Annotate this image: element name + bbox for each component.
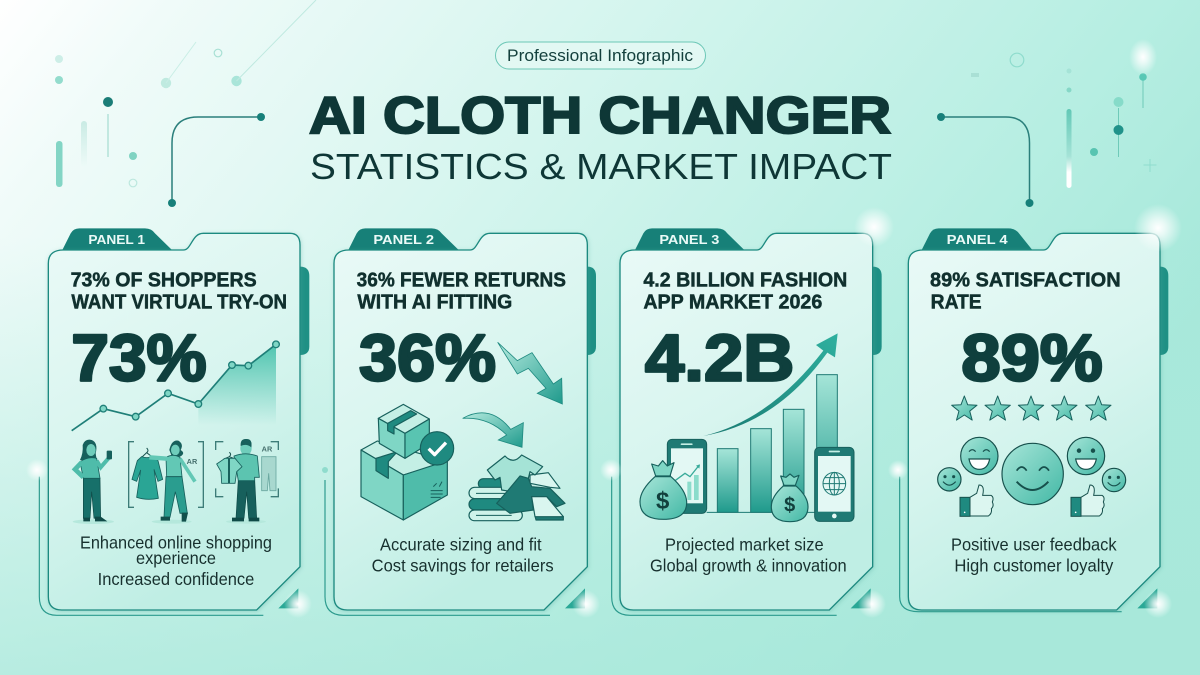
- five star rating: [952, 396, 1111, 420]
- icon: money bag large: $: [656, 487, 669, 514]
- panel 4 big number: 89%: [961, 320, 1103, 394]
- icon: man with shirt and AR frame: [216, 439, 278, 524]
- panel 3: [612, 228, 882, 615]
- subtitle: STATISTICS & MARKET IMPACT: [310, 146, 892, 187]
- icon: AR frame with dress: [129, 441, 203, 524]
- icon: boxes with check: [361, 404, 454, 520]
- icon: phone with chart: [667, 439, 707, 513]
- panel 4 description: High customer loyalty: [954, 556, 1113, 576]
- panel 2 description: Accurate sizing and fit: [380, 535, 542, 555]
- icon: thumbs up right: [1071, 485, 1104, 516]
- panel 4 description: [951, 535, 1117, 576]
- panel 2 description: [372, 535, 554, 576]
- left decoration: [55, 0, 316, 187]
- badge: Professional Infographic: [507, 46, 694, 65]
- panel 3 big number: 4.2B: [645, 320, 794, 394]
- panel 1 description: [80, 532, 272, 589]
- bar chart: [707, 375, 837, 512]
- panel 4 heading: RATE: [931, 291, 982, 313]
- title: AI CLOTH CHANGER: [309, 87, 891, 145]
- panel 3 heading: [643, 270, 847, 313]
- panel 1 description: Increased confidence: [98, 569, 254, 589]
- icon: growth arrow: [703, 333, 838, 436]
- panel 1 description: Enhanced online shopping: [80, 532, 272, 552]
- panel 1: [39, 228, 309, 615]
- icon: money bag small: $: [784, 495, 795, 517]
- icon: down arrow: [498, 342, 562, 404]
- badge: [496, 42, 706, 69]
- panel 4 heading: 89% SATISFACTION: [930, 270, 1121, 292]
- panel 3 heading: APP MARKET 2026: [643, 291, 822, 313]
- icon: man with shirt and AR frame: AR: [262, 444, 273, 453]
- panel 2 label: PANEL 2: [373, 232, 434, 247]
- right decoration: [971, 39, 1157, 188]
- panel 4 description: Positive user feedback: [951, 535, 1117, 555]
- panel 1 heading: [71, 270, 287, 313]
- right connector line: [937, 113, 1034, 207]
- icon: money bag small: [771, 474, 808, 522]
- icon: phone with globe: [815, 447, 854, 521]
- icon: clothing pile: [469, 455, 565, 521]
- panel 3 description: [650, 535, 847, 576]
- icon: woman with phone: [73, 440, 114, 524]
- icon: AR frame with dress: AR: [187, 457, 198, 466]
- panel 4 label: PANEL 4: [947, 232, 1008, 247]
- panel 3 description: Global growth & innovation: [650, 556, 847, 576]
- panel 1 heading: WANT VIRTUAL TRY-ON: [71, 291, 287, 313]
- panel 2 heading: 36% FEWER RETURNS: [357, 270, 566, 292]
- icon: curved arrow: [463, 413, 523, 447]
- line chart: [72, 341, 279, 431]
- panel 2 description: Cost savings for retailers: [372, 556, 554, 576]
- panel 1 label: PANEL 1: [88, 232, 146, 247]
- icon: thumbs up left: [960, 485, 993, 516]
- panel 2 heading: [357, 270, 566, 313]
- icon: money bag large: [640, 461, 687, 519]
- panel 1 description: experience: [136, 548, 216, 568]
- left connector line: [168, 113, 265, 207]
- smiley faces: [938, 437, 1126, 505]
- panel 1 heading: 73% OF SHOPPERS: [71, 270, 257, 292]
- panel 4 heading: [930, 270, 1121, 313]
- panel 3 description: Projected market size: [665, 535, 824, 555]
- glow highlights: [26, 204, 1182, 618]
- panel 1 big number: 73%: [71, 320, 207, 394]
- panel 3 label: PANEL 3: [659, 232, 719, 247]
- panel 4: [900, 228, 1168, 612]
- panel 2 big number: 36%: [359, 320, 496, 394]
- panel 3 heading: 4.2 BILLION FASHION: [643, 270, 847, 292]
- panel 2 heading: WITH AI FITTING: [357, 291, 512, 313]
- panel 2: [325, 228, 596, 615]
